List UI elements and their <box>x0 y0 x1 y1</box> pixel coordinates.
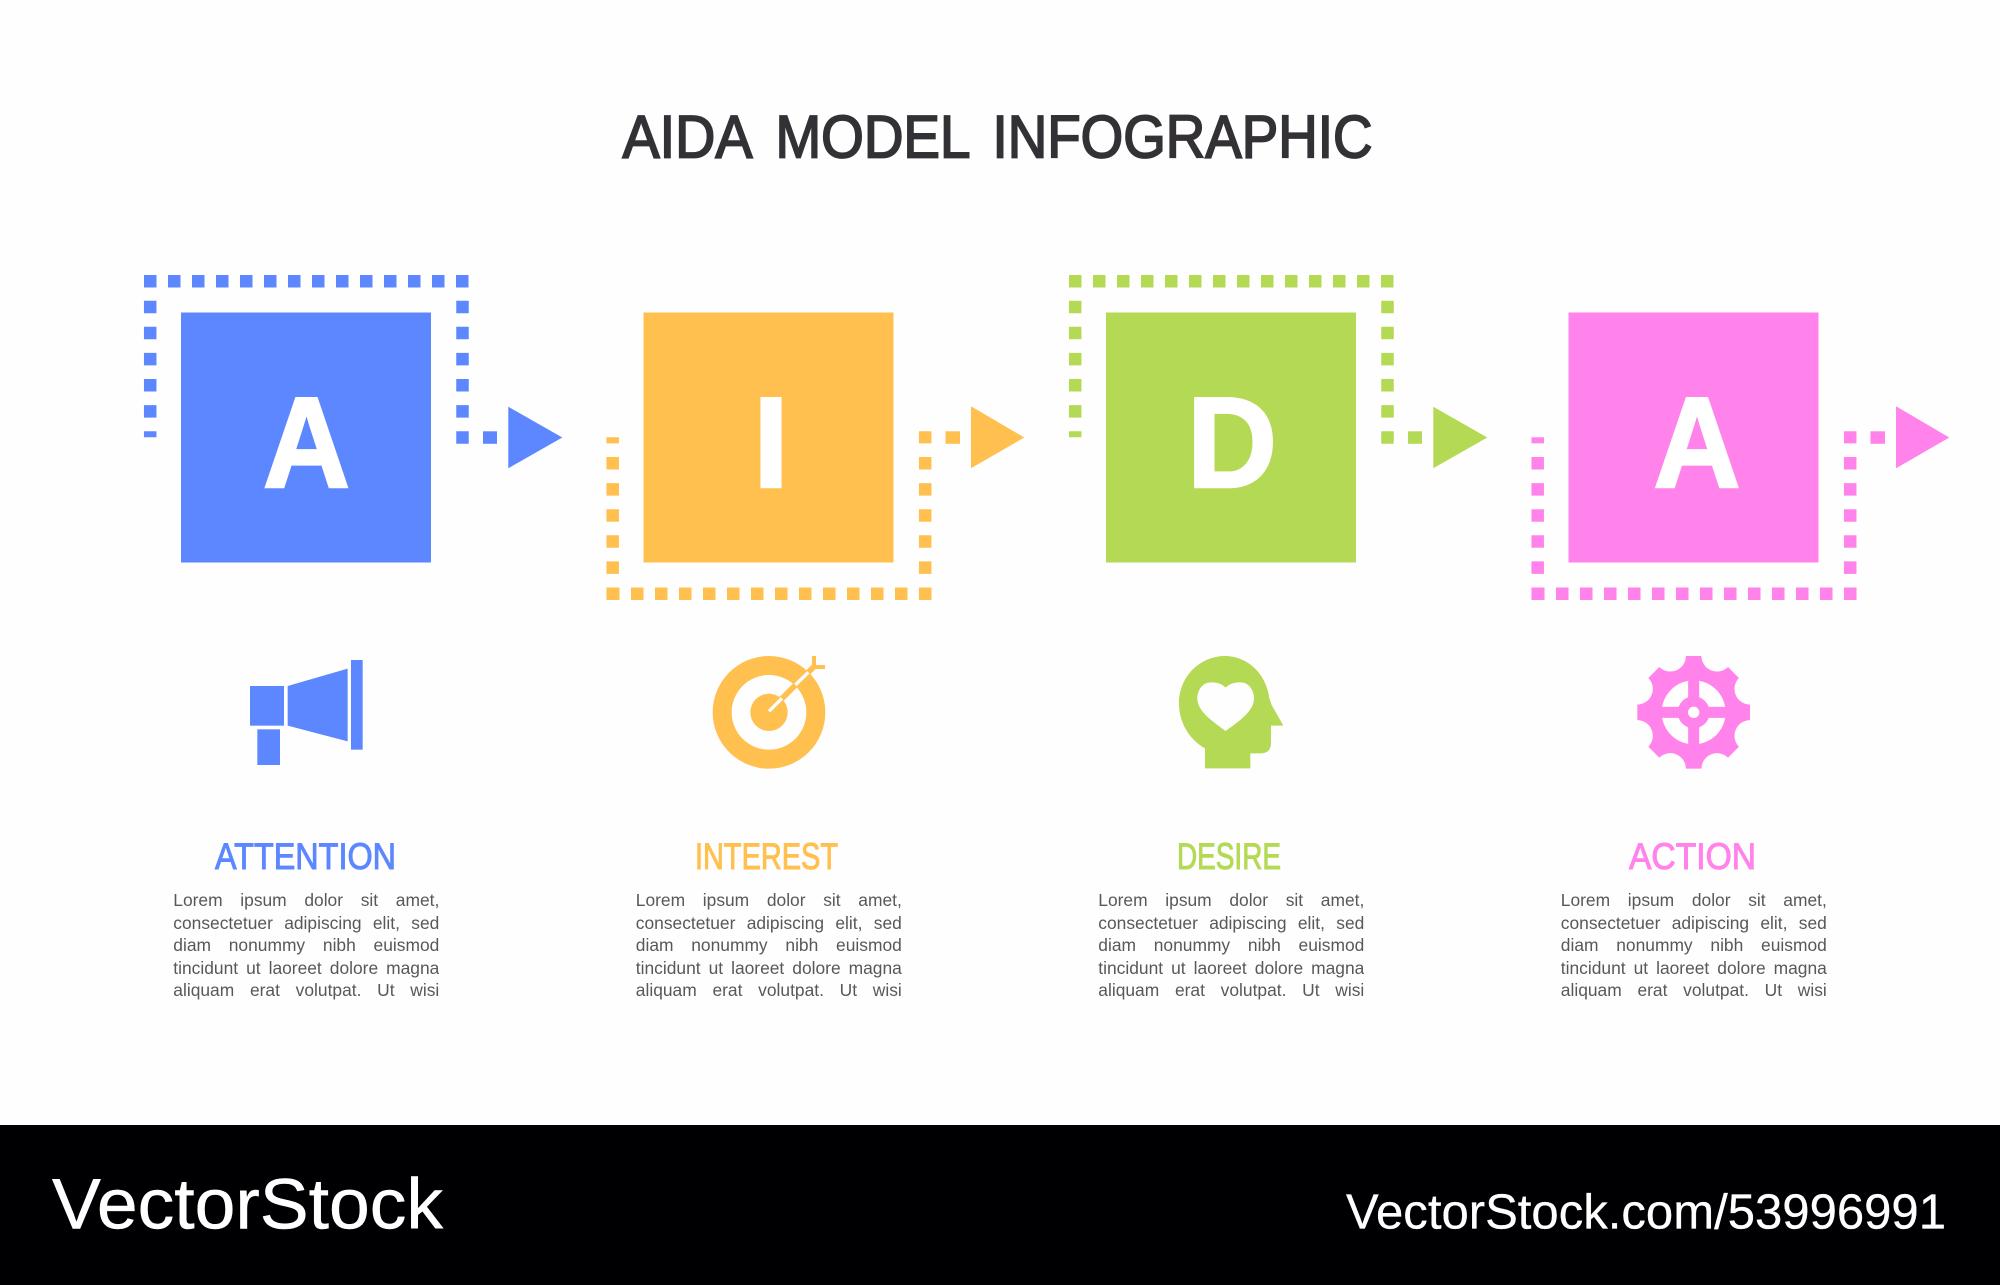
square with letter A <box>1568 312 1818 562</box>
text block: action: Lorem ipsum dolor sit amet, <box>1561 890 1827 910</box>
square with letter A: A <box>263 371 350 515</box>
text block: action: aliquam erat volutpat. Ut wisi <box>1561 980 1827 1000</box>
dotted frame: attention <box>144 281 468 444</box>
footer url text: VectorStock.com/53996991 <box>1346 1185 1946 1239</box>
text block: interest: tincidunt ut laoreet dolore magna <box>636 958 902 978</box>
text block: interest: Lorem ipsum dolor sit amet, <box>636 890 902 910</box>
text block: interest: consectetuer adipiscing elit, sed <box>636 913 902 933</box>
arrow: action <box>1870 406 1949 468</box>
text block: attention: consectetuer adipiscing elit, sed <box>173 913 439 933</box>
footer logo text: VectorStock <box>52 1166 444 1244</box>
text block: desire: tincidunt ut laoreet dolore magna <box>1098 958 1364 978</box>
square with letter I: I <box>753 371 789 515</box>
text block: attention: diam nonummy nibh euismod <box>173 935 439 955</box>
panel: action <box>1532 312 1949 1003</box>
text block: attention: aliquam erat volutpat. Ut wisi <box>173 980 439 1000</box>
text block: action: tincidunt ut laoreet dolore magna <box>1561 958 1827 978</box>
text block: desire <box>1098 889 1364 1003</box>
square with letter A <box>181 312 431 562</box>
text block: desire: diam nonummy nibh euismod <box>1098 935 1364 955</box>
text block: action <box>1561 889 1827 1003</box>
square with letter A: A <box>1654 371 1740 515</box>
heading: desire: DESIRE <box>1177 836 1281 877</box>
text block: action: consectetuer adipiscing elit, sed <box>1561 913 1827 933</box>
panel: interest <box>606 312 1024 1003</box>
arrow: attention <box>483 407 562 468</box>
arrow: desire <box>1408 407 1487 468</box>
text block: attention: Lorem ipsum dolor sit amet, <box>173 890 439 910</box>
text block: desire: Lorem ipsum dolor sit amet, <box>1098 890 1364 910</box>
heading: action: ACTION <box>1629 836 1756 877</box>
panel: attention <box>144 281 562 1003</box>
square with letter I <box>644 312 894 562</box>
text block: attention: tincidunt ut laoreet dolore magna <box>173 958 439 978</box>
panel: desire <box>1069 281 1487 1003</box>
text block: interest: diam nonummy nibh euismod <box>636 935 902 955</box>
dotted frame: action <box>1532 431 1856 600</box>
title: AIDA <box>622 104 752 170</box>
title: INFOGRAPHIC <box>992 104 1372 170</box>
text block: interest: aliquam erat volutpat. Ut wisi <box>636 980 902 1000</box>
icon: megaphone <box>250 660 363 765</box>
text block: interest <box>636 889 902 1003</box>
square with letter D: D <box>1187 371 1277 515</box>
icon: head with heart <box>1179 656 1283 768</box>
title <box>622 104 1372 170</box>
text block: desire: consectetuer adipiscing elit, sed <box>1098 913 1364 933</box>
heading: attention: ATTENTION <box>215 836 396 877</box>
arrow: interest <box>946 406 1024 468</box>
text block: desire: aliquam erat volutpat. Ut wisi <box>1098 980 1364 1000</box>
square with letter D <box>1106 312 1356 562</box>
dotted frame: desire <box>1069 281 1394 444</box>
icon: target with dart <box>713 656 825 769</box>
text block: action: diam nonummy nibh euismod <box>1561 935 1827 955</box>
icon: gear <box>1637 656 1750 769</box>
dotted frame: interest <box>606 431 932 600</box>
footer bar <box>0 1125 2000 1285</box>
title: MODEL <box>776 104 970 170</box>
text block: attention <box>173 889 439 1003</box>
heading: interest: INTEREST <box>695 836 838 877</box>
